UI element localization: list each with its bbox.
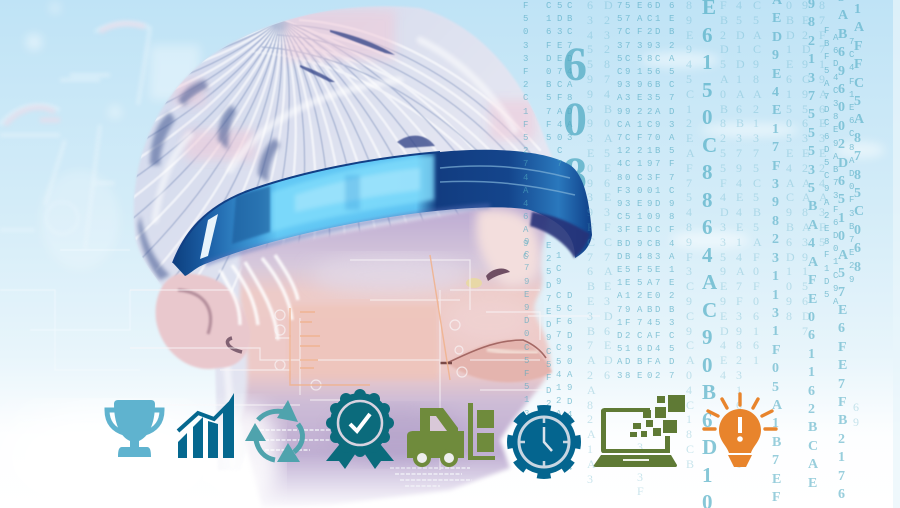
data rain columns: 89E945C12EAF75489F3C9C9CA04C18CB: [686, 0, 695, 471]
dark crisp hair streaks: [300, 30, 435, 148]
bright fade bottom-left: [0, 408, 220, 508]
data rain columns: 7C4F1E6C8AD0F3B7E29: [849, 37, 854, 285]
data rain columns: E25D7ED9C5FD20BED8: [546, 241, 551, 475]
data rain columns: 6C2985632C7193090DC85AEB4ADF0: [647, 1, 652, 381]
blurred left circuit traces: [0, 23, 150, 250]
data rain columns: 5AB696002D6510A57E6FE7FB2176: [838, 0, 848, 502]
data rain columns: 9E2D9C9563E2AA8A39156D7: [802, 0, 811, 338]
data rain columns: 0: [702, 105, 712, 129]
data rain columns: DC6D90A9D4T7B4: [567, 291, 572, 473]
big digits 608: 0: [563, 93, 587, 146]
data rain columns: 0BD1E61505E4AC9B6D1098: [786, 0, 795, 323]
dark navy hair shadows: [138, 80, 280, 280]
visor white reflection: [200, 214, 218, 259]
data rain columns: 1: [702, 50, 712, 74]
data rain columns: 393F: [637, 440, 644, 498]
icon: trophy: [107, 400, 162, 457]
white hair highlights: [152, 37, 518, 402]
upper cheek shine: [310, 255, 470, 295]
data rain columns: C: [702, 132, 717, 156]
data rain columns: 6345599993E0939FC76BE3B7A2A82A1A3: [587, 0, 596, 486]
data rain columns: 75735C9A9C7148F9C3BDE1A71D5A3: [617, 1, 622, 381]
ear: [156, 273, 250, 369]
data rain columns: 45D1D1A6B3794E4E14A7F398231665A1: [736, 0, 745, 471]
data rain columns: 4: [702, 242, 712, 266]
lower left circuit lines: [0, 250, 140, 420]
data rain columns: 8: [702, 160, 712, 184]
lavender shadow below jaw: [330, 407, 470, 463]
icon: idea bulb: [704, 394, 776, 467]
data rain columns: 6: [702, 215, 712, 239]
data rain columns: CBC7D4A8DA3: [567, 1, 572, 143]
icon: rising bar chart: [178, 393, 234, 458]
inner visor dark area: [530, 212, 590, 258]
data rain columns: EAF3519E21F21C0E1E94F52A7C6BE: [637, 1, 642, 381]
nose: [476, 209, 540, 286]
data rain columns: 5: [702, 78, 712, 102]
pink overlay patches: [175, 10, 535, 160]
visor top rim: [173, 152, 440, 263]
white neck-side fade: [210, 404, 280, 508]
data rain columns: C5AC98A21375C5B5AF0F06161: [753, 0, 762, 367]
big digits 608: 8: [563, 148, 587, 201]
hair strands: [134, 9, 541, 402]
data rain columns: 98213755535BA4AFE061162BCAE: [808, 0, 818, 491]
data rain columns: D232874B0A5E6E3FC7AE3D6ED6: [604, 0, 613, 382]
icon: award ribbon: [326, 389, 394, 469]
data rain columns: D1D3C6B5A90B7F1D9CB3E70D5F4A2: [655, 1, 660, 381]
data rain columns: 1AFFC5A8785C068: [854, 2, 864, 275]
icon: laptop with pixels: [594, 395, 685, 467]
data rain columns: B: [702, 380, 716, 404]
face and neck: [240, 205, 552, 508]
visor dark panel: [232, 186, 270, 244]
data rain columns: 9: [702, 325, 712, 349]
icon: forklift with boxes: [407, 403, 495, 467]
data rain columns: 9C79E9D0C5F5134C6: [524, 237, 529, 458]
data rain columns: 8: [702, 188, 712, 212]
cheek warm tone: [445, 295, 535, 345]
data rain columns: 0: [702, 352, 712, 376]
data rain columns: C16FD0B57F5: [546, 1, 551, 143]
data rain columns: 1C9C5F7C5412AD2CB: [556, 251, 561, 472]
fan of white strands: [134, 19, 541, 290]
icon: recycle arrows: [245, 400, 303, 462]
data rain columns: 6EB2A5C7D3A5F7C98F4A1E2B3C5D7: [669, 1, 674, 381]
big digits 608: [563, 38, 587, 201]
data rain columns: FBF5A7DC6D5C9A2E8F1D5: [824, 26, 829, 300]
data rain columns: 1: [702, 462, 712, 486]
nostril: [486, 269, 510, 281]
pink tint on circuit traces: [5, 24, 145, 125]
hair: [134, 6, 552, 436]
data rain columns: AED9E4E17F398231131F05A1B7EF: [772, 0, 782, 505]
right edge light strip: [893, 0, 900, 508]
data rain columns: FB2D5A0B8255F4D3359E9ED4E4: [720, 0, 729, 382]
hair over temple: [220, 255, 298, 340]
visor dark stripes: [440, 166, 575, 195]
faint code blocks at the neck: [260, 430, 472, 486]
visor: [173, 150, 592, 276]
nose tip stud: [466, 278, 482, 288]
circuit lines over the face: [130, 260, 600, 470]
data rain columns: D: [702, 435, 717, 459]
data rain columns: 87F719A6E3E24A3F5: [819, 0, 828, 249]
data rain columns: 6: [702, 408, 712, 432]
fan of grey-blue strands: [134, 21, 532, 281]
visor lower blue shadow: [205, 206, 490, 264]
icon: gear with clock: [511, 409, 577, 475]
data rain columns: C: [702, 298, 717, 322]
soft clouds: [26, 3, 885, 270]
data rain columns: F5033F2C1F5274A46A9C: [523, 1, 528, 262]
lower orange circuit panel: [288, 305, 438, 380]
data rain columns: 57C7C9339AC2C0335FDB5E19F21D8: [625, 1, 630, 381]
data rain columns: 6: [702, 22, 712, 46]
lips: [440, 340, 552, 382]
data rain columns: A6D4C38E9AB73F6D01C9A: [833, 33, 838, 307]
big digits 608: 6: [563, 38, 587, 91]
data rain columns: A: [702, 270, 717, 294]
data rain columns: 5D3EE7CFA40C7: [557, 1, 562, 169]
data rain columns: 69: [853, 400, 859, 429]
visor glare: [272, 155, 434, 232]
orange circuit traces: [290, 255, 450, 385]
